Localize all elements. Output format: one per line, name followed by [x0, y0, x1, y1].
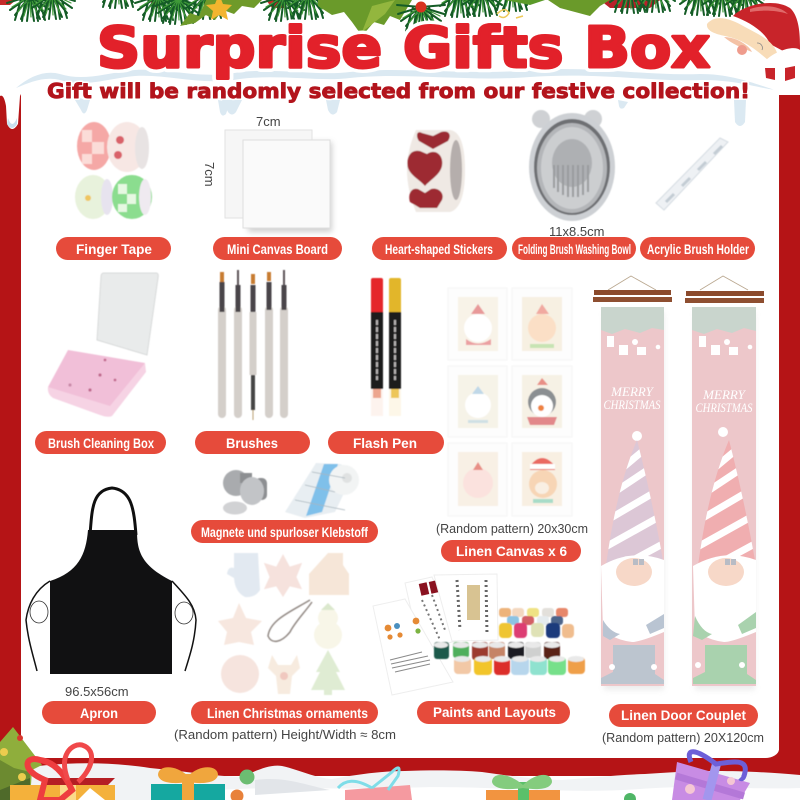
label: Brushes: Brushes: [226, 436, 278, 451]
ornament: ribbon: [268, 600, 312, 641]
label: Folding Brush Washing Bowl: Folding Brush Washing Bowl: [518, 242, 631, 257]
label: Folding Brush Washing Bowl: [512, 237, 636, 260]
banner: left door couplet: CHRISTMAS: [604, 397, 661, 412]
item: finger tape: [56, 122, 171, 260]
icon: folding bowl: [529, 110, 615, 221]
ornament: gingerbread house: [309, 553, 349, 595]
item: folding brush washing bowl: [512, 110, 636, 260]
gift: pink gift with blue bow: [338, 768, 412, 800]
canvas: penguin: [512, 366, 572, 437]
ornament: mitten: [227, 553, 260, 597]
snow drips across the top: [0, 0, 800, 129]
icon: clear box with pink sponge: [48, 273, 158, 417]
dimension: 11x8.5cm: 11x8.5cm: [549, 224, 604, 239]
icon: nine ornaments: [218, 553, 349, 695]
santa at top right corner: [707, 3, 800, 95]
canvas: snowman: [448, 366, 507, 437]
label: Linen Door Couplet: Linen Door Couplet: [621, 708, 746, 723]
dimension: 7cm width: 7cm: [256, 114, 281, 129]
canvas: reindeer: [512, 443, 572, 516]
icon: magnets: [223, 470, 267, 514]
gift: orange gift with green bow: [486, 775, 636, 800]
label: Finger Tape: Finger Tape: [76, 242, 152, 257]
label: Brush Cleaning Box: Brush Cleaning Box: [48, 436, 154, 451]
dimension: 96.5x56cm: 96.5x56cm: [65, 684, 129, 699]
label: Linen Canvas x 6: Linen Canvas x 6: [456, 544, 567, 559]
item: flash pen: [328, 278, 444, 454]
icon: two white canvases: [225, 130, 332, 232]
canvas: pig: [448, 443, 507, 516]
canvas: bear: [512, 288, 572, 360]
caption: couplet size: (Random pattern) 20X120cm: [602, 730, 764, 745]
label: Linen Christmas ornaments: [191, 701, 378, 724]
label: Brushes: [195, 431, 310, 454]
banner: left door couplet: [593, 276, 672, 690]
ornament: snowflake: [263, 553, 303, 598]
snow ground and wavy red band: [0, 763, 800, 800]
icon: clear adhesive roll: [285, 463, 359, 518]
item: magnets and adhesive: [191, 463, 378, 543]
banner: right door couplet: [685, 276, 764, 690]
item: acrylic brush holder: [640, 138, 755, 260]
item: linen christmas ornaments: [174, 553, 396, 742]
banner: right door couplet: CHRISTMAS: [696, 400, 753, 415]
item: brush cleaning box: [35, 273, 166, 454]
canvas: cat: [448, 288, 507, 360]
item: brushes: [195, 270, 310, 454]
ornament: reindeer: [268, 655, 300, 694]
label: Linen Christmas ornaments: Linen Christmas ornaments: [207, 706, 368, 721]
christmas tree bottom left: [0, 727, 42, 800]
label: Paints and Layouts: [417, 701, 570, 724]
label: Magnete und spurloser Klebstoff: [191, 520, 378, 543]
item: linen door couplet: [593, 276, 764, 745]
item: paints and layouts: [373, 574, 585, 724]
label: Magnete und spurloser Klebstoff: Magnete und spurloser Klebstoff: [201, 525, 368, 540]
label: Mini Canvas Board: [213, 237, 342, 260]
item: apron: [26, 488, 196, 724]
label: Brush Cleaning Box: [35, 431, 166, 454]
title: Surprise Gifts Box: [97, 16, 710, 81]
label: Mini Canvas Board: Mini Canvas Board: [227, 242, 328, 257]
item: mini canvas board: [202, 114, 342, 260]
pine garland with holly and ornaments: [0, 0, 769, 36]
subtitle: Gift will be randomly selected from our festive collection!: [47, 79, 750, 103]
gift: teal gift with orange bow: [151, 767, 254, 800]
caption: ornament size: (Random pattern) Height/Width ≈ 8cm: [174, 727, 396, 742]
icon: five brushes: [222, 270, 284, 420]
label: Flash Pen: [328, 431, 444, 454]
label: Heart-shaped Stickers: Heart-shaped Stickers: [385, 242, 493, 257]
banner: left door couplet: MERRY: [610, 384, 655, 399]
icon: layout sheets: [373, 574, 498, 695]
ornament: christmas tree: [311, 650, 345, 695]
banner: right door couplet: MERRY: [702, 387, 747, 402]
label: Linen Door Couplet: [609, 704, 758, 727]
icon: heart sticker roll: [407, 130, 465, 212]
label: Linen Canvas x 6: [441, 540, 581, 562]
label: Flash Pen: Flash Pen: [353, 436, 417, 451]
label: Apron: Apron: [80, 706, 118, 721]
ornament: snowman: [314, 603, 342, 649]
ornament: bauble: [221, 655, 259, 693]
dimension: 7cm height: 7cm: [202, 162, 217, 187]
title: Surprise Gifts Box: [97, 16, 710, 81]
icon: red and yellow pens: [371, 278, 401, 416]
label: Apron: [42, 701, 156, 724]
icon: acrylic holder: [656, 138, 728, 210]
item: heart-shaped stickers: [372, 130, 507, 260]
label: Paints and Layouts: Paints and Layouts: [433, 705, 556, 720]
ornament: star: [218, 603, 262, 645]
gift: purple gift with blue ribbon: [672, 752, 750, 800]
icon: black apron: [26, 488, 196, 674]
icon: paint jars: [434, 608, 585, 675]
gift: yellow gift with red bow: [10, 745, 115, 800]
caption: canvas size: (Random pattern) 20x30cm: [436, 521, 588, 536]
item: linen canvas x 6: [436, 288, 588, 562]
subtitle: Gift will be randomly selected from our festive collection!: [47, 79, 750, 103]
icon: finger tape rolls: [75, 122, 152, 219]
label: Acrylic Brush Holder: Acrylic Brush Holder: [647, 242, 750, 257]
